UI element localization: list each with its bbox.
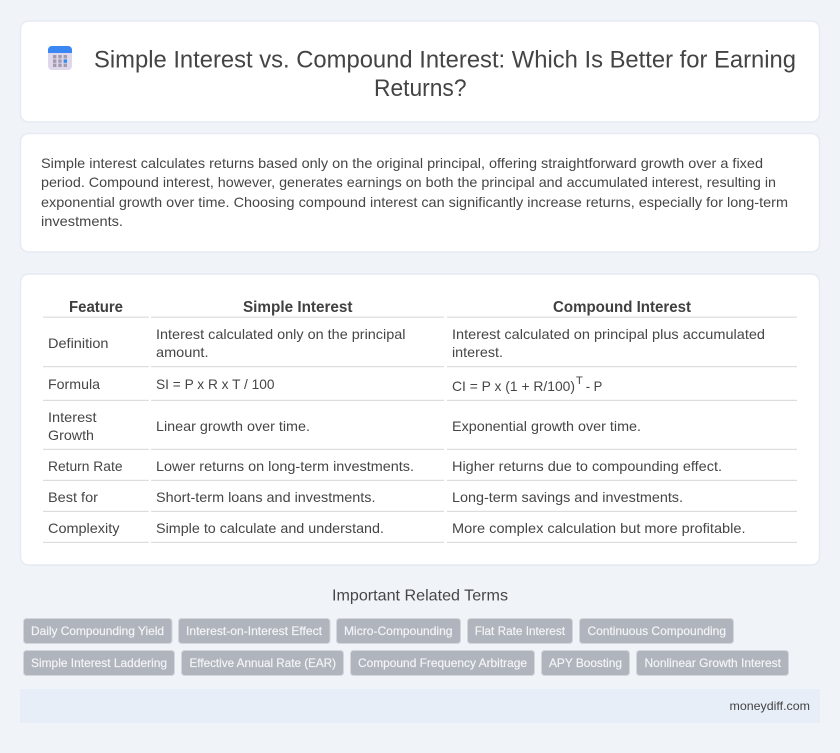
- tag: compound frequency arbitrage: Compound Frequency Arbitrage: [358, 656, 527, 670]
- row: best for: Long-term savings and investments.: [452, 489, 683, 505]
- panel: title card: [20, 21, 820, 122]
- text block: introduction: Simple interest calculates returns based only on the original principal, offering straightforward growth over a fixed: [41, 155, 763, 171]
- tag: apy boosting: APY Boosting: [549, 656, 622, 670]
- tag: compound frequency arbitrage: [350, 650, 534, 676]
- tag: nonlinear growth interest: [636, 650, 788, 676]
- tag: micro-compounding: Micro-Compounding: [344, 624, 452, 638]
- table header row: Feature: [69, 299, 123, 316]
- row: complexity: Simple to calculate and understand.: [156, 520, 384, 536]
- row: return rate: [48, 458, 722, 474]
- title: Simple Interest vs. Compound Interest: Which Is Better for Earning: [94, 46, 796, 74]
- table header row: [69, 299, 691, 316]
- tag: daily compounding yield: Daily Compounding Yield: [31, 624, 164, 638]
- title: [94, 46, 796, 102]
- row: formula: CI = P x (1 + R/100): [452, 378, 575, 394]
- tag: simple interest laddering: Simple Interest Laddering: [31, 656, 167, 670]
- tag: flat rate interest: [468, 618, 572, 644]
- row: best for: Short-term loans and investments.: [156, 489, 376, 505]
- tag: simple interest laddering: [24, 650, 174, 676]
- tag: interest-on-interest effect: [178, 618, 330, 644]
- row: formula: SI = P x R x T / 100: [156, 376, 275, 392]
- row: definition: amount.: [156, 344, 208, 360]
- row: return rate: Return Rate: [48, 458, 123, 474]
- text block: introduction: [41, 155, 788, 229]
- row: definition: Interest calculated only on the principal: [156, 326, 406, 342]
- row: formula: - P: [586, 378, 602, 394]
- row: complexity: More complex calculation but more profitable.: [452, 520, 746, 536]
- text block: introduction: investments.: [41, 213, 123, 229]
- footer: moneydiff.com: [730, 699, 810, 713]
- table header row: Compound Interest: [553, 299, 691, 316]
- row: definition: Definition: [48, 335, 108, 351]
- row: formula: T: [576, 375, 583, 387]
- row: interest growth: Exponential growth over time.: [452, 418, 641, 434]
- row: return rate: Higher returns due to compounding effect.: [452, 458, 722, 474]
- row: interest growth: [48, 409, 641, 443]
- tag: micro-compounding: [336, 618, 460, 644]
- row: definition: [48, 326, 765, 360]
- text block: introduction: exponential growth over time. Choosing compound interest can significantly increase returns, especially for long-term: [41, 194, 788, 210]
- tag: continuous compounding: Continuous Compounding: [588, 624, 726, 638]
- row: interest growth: Linear growth over time.: [156, 418, 310, 434]
- panel: comparison table: [20, 274, 820, 565]
- tag: daily compounding yield: [24, 618, 172, 644]
- row: formula: Formula: [48, 376, 100, 392]
- row: return rate: Lower returns on long-term investments.: [156, 458, 414, 474]
- footer: [20, 689, 820, 723]
- row: complexity: [48, 520, 746, 536]
- panel: intro text card: [20, 134, 820, 252]
- table header row: Simple Interest: [243, 299, 352, 316]
- tag: effective annual rate: [182, 650, 344, 676]
- tag: nonlinear growth interest: Nonlinear Growth Interest: [644, 656, 782, 670]
- row: best for: [48, 489, 683, 505]
- tag: flat rate interest: Flat Rate Interest: [475, 624, 566, 638]
- tags: related terms: [24, 618, 788, 676]
- icon: calendar: [48, 46, 72, 70]
- row: best for: Best for: [48, 489, 98, 505]
- tag: interest-on-interest effect: Interest-on-Interest Effect: [186, 624, 323, 638]
- row: definition: interest.: [452, 344, 503, 360]
- row: interest growth: Growth: [48, 427, 94, 443]
- table grid lines: [43, 317, 797, 543]
- row: formula: [48, 375, 602, 394]
- tag: effective annual rate: Effective Annual Rate (EAR): [190, 656, 336, 670]
- text block: introduction: period. Compound interest, however, generates earnings on both the principal and accumulated interest, resulting in: [41, 174, 776, 190]
- row: definition: Interest calculated on principal plus accumulated: [452, 326, 765, 342]
- title: Returns?: [374, 75, 466, 102]
- row: interest growth: Interest: [48, 409, 97, 425]
- row: complexity: Complexity: [48, 520, 120, 536]
- heading: important related terms: Important Related Terms: [332, 588, 508, 604]
- tag: continuous compounding: [580, 618, 734, 644]
- tag: apy boosting: [542, 650, 630, 676]
